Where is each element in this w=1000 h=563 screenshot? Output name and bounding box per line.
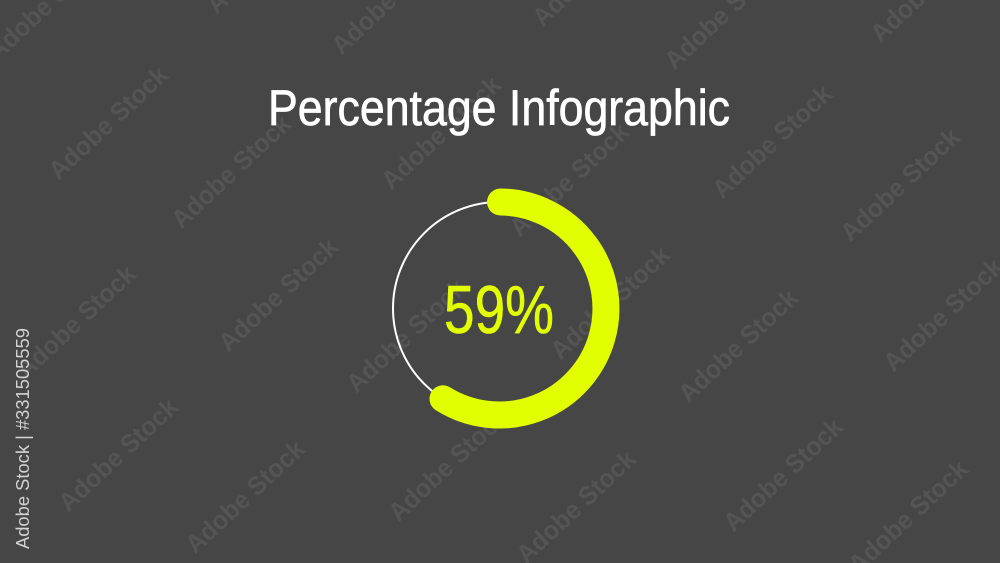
watermark pattern: Adobe Stock <box>503 116 635 242</box>
percentage value: 59% <box>444 272 554 348</box>
donut chart: 59% <box>393 202 606 415</box>
watermark pattern: Adobe Stock <box>375 69 507 195</box>
watermark pattern: Adobe Stock <box>340 272 472 398</box>
watermark pattern: Adobe Stock <box>382 401 514 527</box>
watermark pattern: Adobe Stock <box>42 59 174 185</box>
watermark pattern: Adobe Stock <box>672 282 804 408</box>
watermark pattern: Adobe Stock <box>706 78 838 204</box>
watermark pattern: Adobe Stock <box>834 121 966 247</box>
watermark pattern: Adobe Stock <box>544 239 676 365</box>
watermark pattern: Adobe Stock <box>165 108 297 234</box>
watermark pattern: Adobe Stock <box>179 433 311 559</box>
watermark pattern: Adobe Stock <box>717 411 849 537</box>
chart progress arc <box>443 202 606 415</box>
side credit: Adobe Stock | #331505559 <box>13 328 33 549</box>
watermark pattern: Adobe Stock <box>10 258 142 384</box>
watermark pattern: Adobe Stock <box>52 391 184 517</box>
watermark pattern: Adobe Stock <box>212 231 344 357</box>
title: Percentage Infographic <box>268 80 730 136</box>
chart track ring <box>393 202 606 415</box>
